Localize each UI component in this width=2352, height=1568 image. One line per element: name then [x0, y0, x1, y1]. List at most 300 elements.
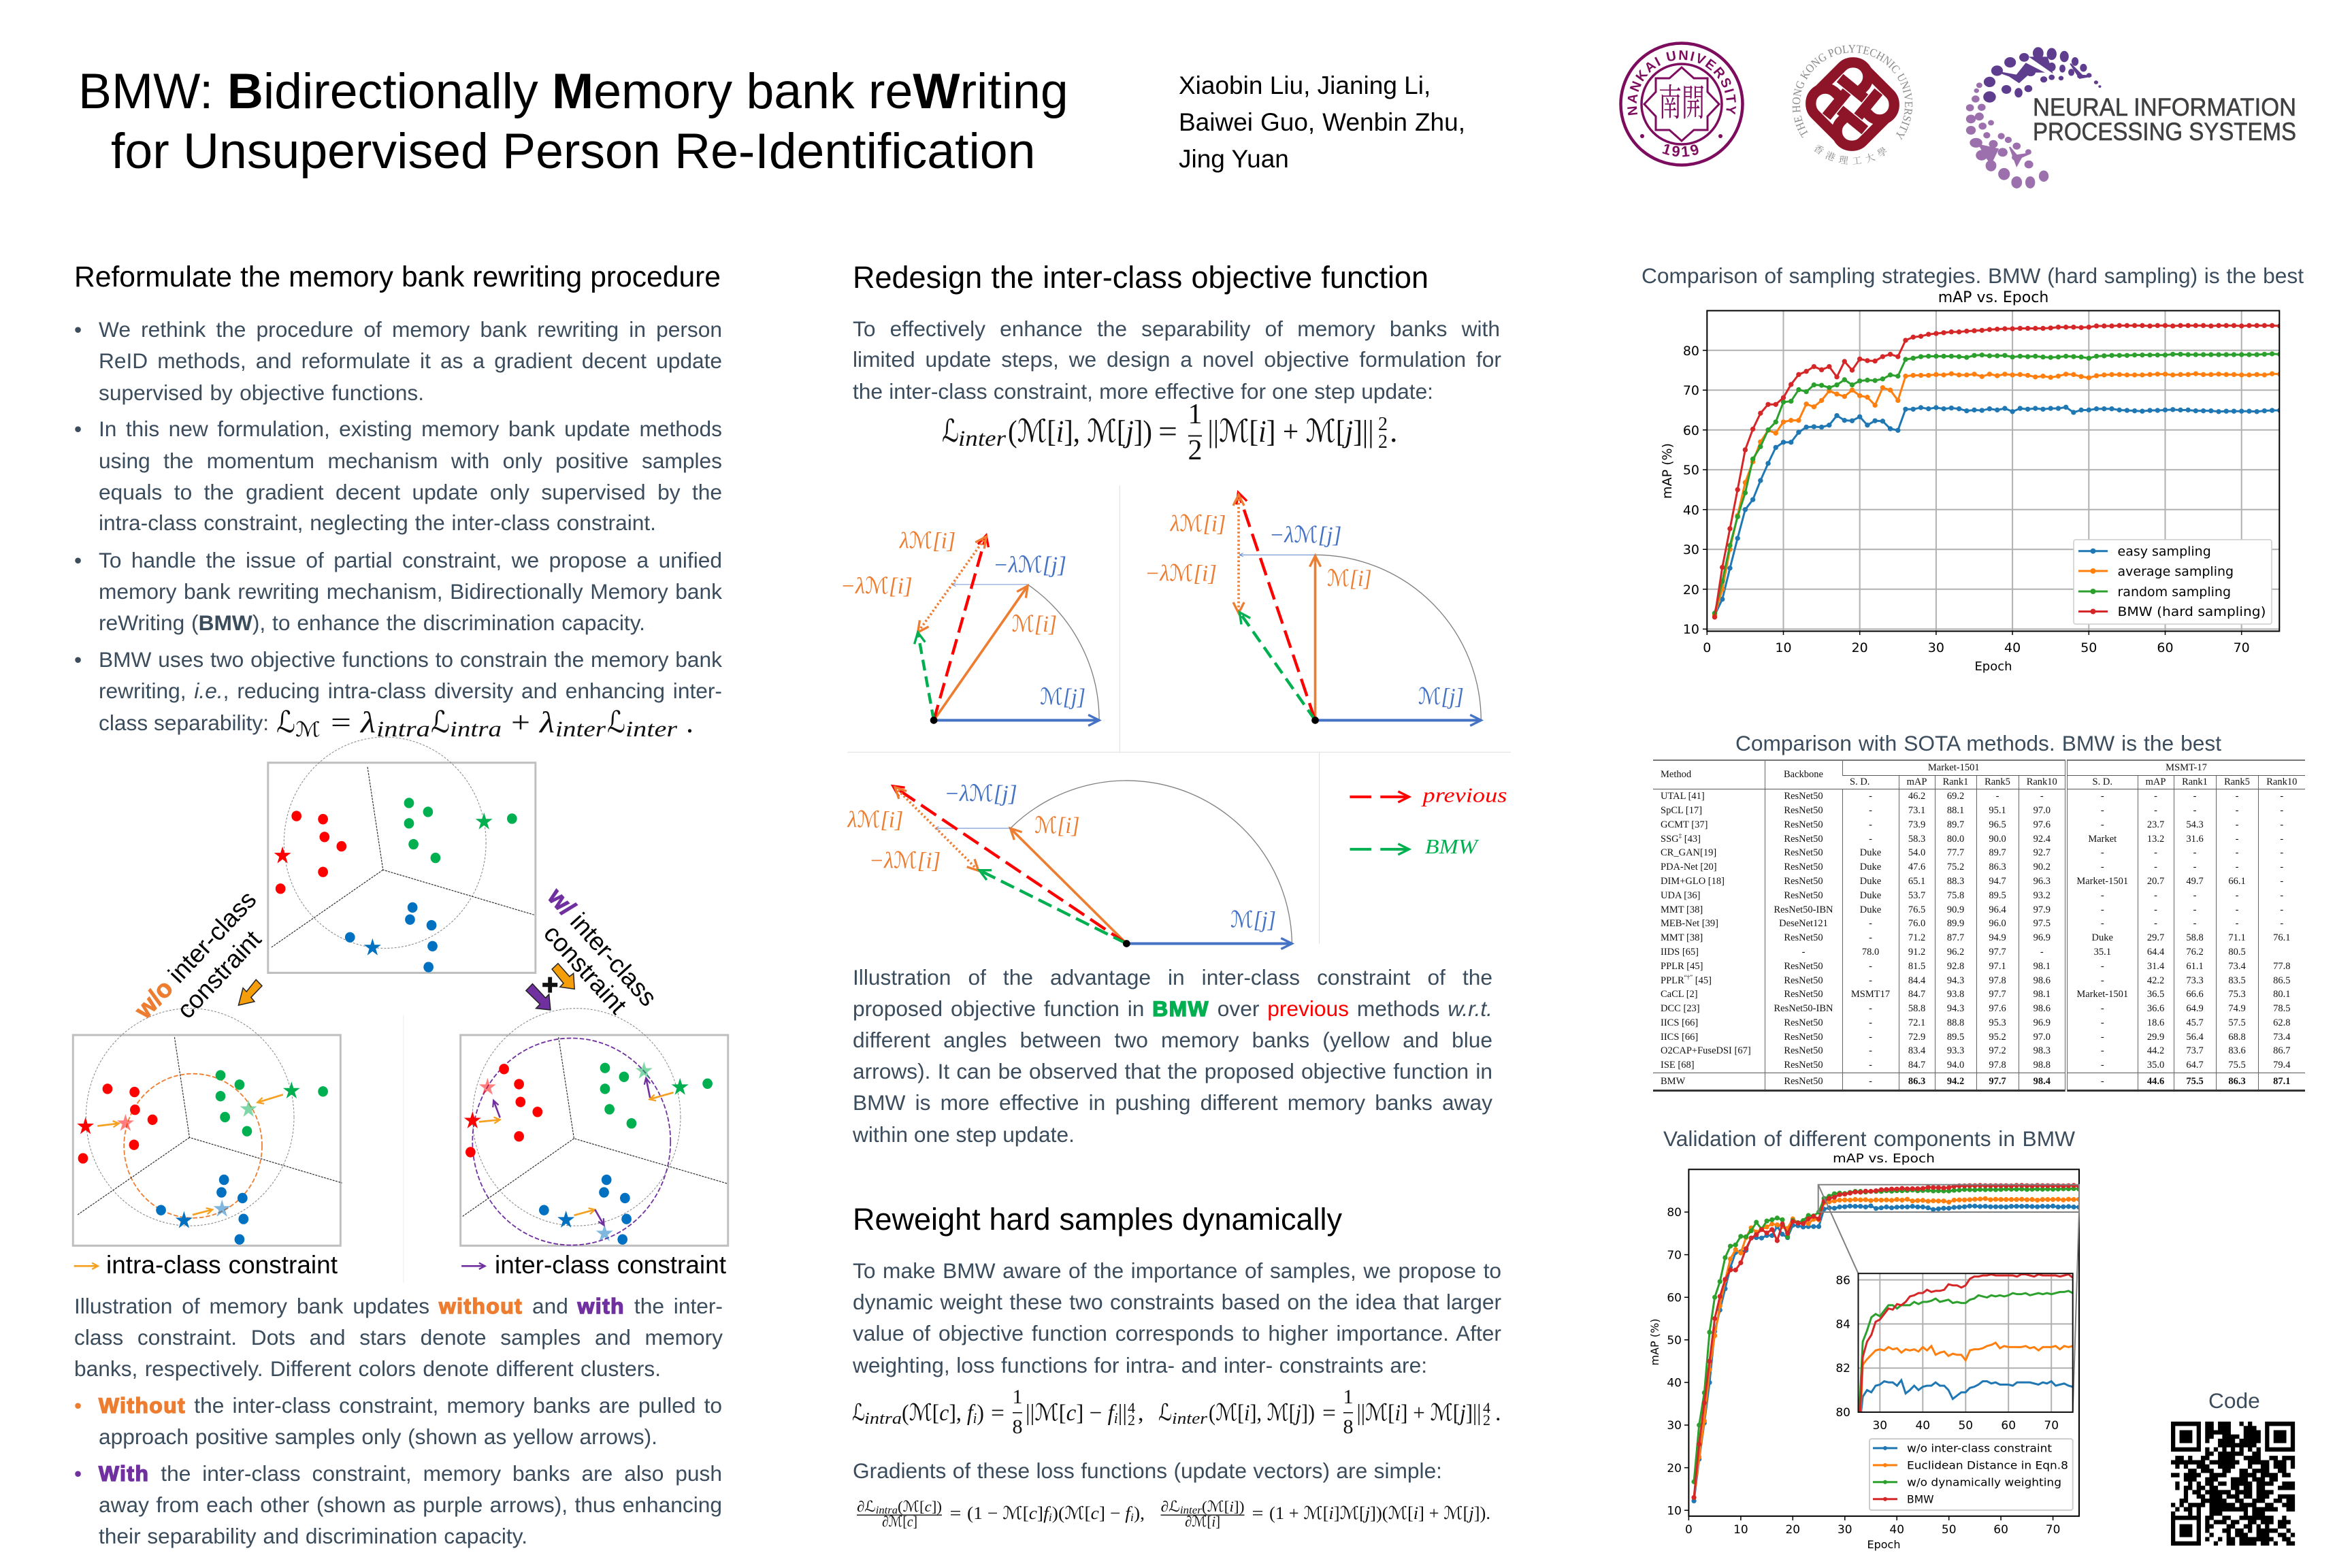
table: comparison with SOTA methods: 74.9 — [2228, 1003, 2246, 1014]
table: comparison with SOTA methods: ResNet50 — [1784, 819, 1823, 830]
text block: memory bank explanation: • — [74, 1461, 82, 1486]
text block: memory bank explanation: banks, respectively. Different colors denote different clusters. — [74, 1356, 661, 1381]
table: comparison with SOTA methods: - — [2101, 961, 2104, 972]
table: comparison with SOTA methods: 77.7 — [1947, 847, 1964, 858]
text block: reformulate bullets: • — [74, 317, 82, 342]
table: comparison with SOTA methods: 86.3 — [1989, 862, 2006, 872]
table: comparison with SOTA methods: - — [2236, 918, 2238, 929]
table: comparison with SOTA methods: 36.6 — [2147, 1003, 2164, 1014]
formula: gradients: ∂ℒ — [857, 1498, 875, 1515]
table: comparison with SOTA methods: Rank10 — [2027, 777, 2057, 787]
table: comparison with SOTA methods: 58.8 — [1908, 1003, 1925, 1014]
chart title: mAP vs. Epoch — [1938, 289, 2048, 306]
chart: sampling strategies mAP vs epoch: 80 — [1683, 344, 1699, 359]
table: comparison with SOTA methods: - — [2280, 819, 2283, 830]
formula: weighted losses: . — [1495, 1401, 1501, 1426]
table: comparison with SOTA methods: - — [2101, 975, 2104, 985]
table: comparison with SOTA methods: 89.7 — [1947, 819, 1964, 830]
table: comparison with SOTA methods: 73.9 — [1908, 819, 1925, 830]
panel: obtuse angle: ℳ[j] — [1230, 907, 1276, 932]
heading: code: Code — [2208, 1388, 2260, 1413]
table: comparison with SOTA methods: - — [2154, 847, 2157, 858]
table: comparison with SOTA methods: 94.3 — [1947, 975, 1964, 985]
table: comparison with SOTA methods: 93.2 — [2034, 890, 2051, 901]
table: comparison with SOTA methods: - — [2154, 862, 2157, 872]
table: comparison with SOTA methods: Rank5 — [1984, 777, 2010, 787]
table: comparison with SOTA methods: - — [2193, 904, 2196, 915]
table: comparison with SOTA methods: 75.5 — [2186, 1076, 2204, 1087]
text block: reformulate bullets: intra-class constraint, neglecting the inter-class constraint. — [99, 510, 656, 535]
formula: gradients: c]) — [925, 1498, 941, 1515]
axis tick labels: 70 — [2234, 640, 2250, 655]
table: comparison with SOTA methods: - — [1869, 932, 1872, 943]
text block: advantage illustration: different angles between two memory banks (yellow and blue — [853, 1028, 1492, 1052]
table: comparison with SOTA methods: 87.1 — [2273, 1076, 2290, 1087]
table: comparison with SOTA methods: - — [2280, 847, 2283, 858]
table: comparison with SOTA methods: 76.2 — [2186, 947, 2204, 958]
inset chart: 40 — [1915, 1419, 1930, 1433]
table: comparison with SOTA methods: Rank1 — [2182, 777, 2208, 787]
text block: memory bank explanation: their separability and discrimination capacity. — [99, 1524, 527, 1548]
table: comparison with SOTA methods: ISE [68] — [1661, 1060, 1695, 1071]
text block: reformulate bullets: memory bank rewriting mechanism, Bidirectionally Memory bank — [99, 579, 722, 604]
formula: gradients — [857, 1498, 1490, 1530]
table: comparison with SOTA methods: 79.4 — [2273, 1060, 2290, 1071]
table: comparison with SOTA methods: GCMT [37] — [1661, 819, 1708, 830]
axis tick labels: 50 — [1942, 1523, 1957, 1537]
table: comparison with SOTA methods: - — [2193, 791, 2196, 802]
table: comparison with SOTA methods: - — [1869, 918, 1872, 929]
table: comparison with SOTA methods: 44.6 — [2147, 1076, 2164, 1087]
table: comparison with SOTA methods: 73.1 — [1908, 805, 1925, 816]
table: comparison with SOTA methods: - — [2280, 862, 2283, 872]
inset chart — [1835, 1273, 2073, 1433]
table: comparison with SOTA methods: 88.8 — [1947, 1017, 1964, 1028]
formula: weighted losses: = — [991, 1401, 1004, 1426]
table: comparison with SOTA methods: - — [2101, 1045, 2104, 1056]
table: comparison with SOTA methods: 97.1 — [1989, 961, 2006, 972]
table: comparison with SOTA methods: 46.2 — [1908, 791, 1925, 802]
table: comparison with SOTA methods: 96.4 — [1989, 904, 2006, 915]
axis tick labels: 0 — [1685, 1523, 1693, 1537]
table: comparison with SOTA methods: CR_GAN[19] — [1661, 847, 1716, 858]
logo: Nankai University: 1919 — [1662, 144, 1699, 157]
table: comparison with SOTA methods: mAP — [2146, 777, 2166, 787]
table: comparison with SOTA methods: - — [2154, 890, 2157, 901]
text block: redesign — [853, 316, 1501, 404]
table: comparison with SOTA methods: 80.0 — [1947, 834, 1964, 845]
legend: w/o dynamically weighting — [1907, 1477, 2061, 1489]
table: comparison with SOTA methods: - — [2193, 890, 2196, 901]
table: comparison with SOTA methods: Market — [2088, 834, 2117, 845]
table: comparison with SOTA methods: 42.2 — [2147, 975, 2164, 985]
formula: weighted losses: inter — [1172, 1410, 1208, 1428]
logo: Hong Kong Polytechnic University: THE HONG KONG POLYTECHNIC UNIVERSITY — [1793, 45, 1912, 140]
table: comparison with SOTA methods: - — [2154, 904, 2157, 915]
panel: acute angle — [840, 528, 1099, 720]
chart: component validation mAP vs epoch: 40 — [1667, 1376, 1682, 1390]
diagram: vector update illustration — [840, 486, 1511, 947]
QR code — [2171, 1424, 2295, 1544]
table: comparison with SOTA methods: - — [1869, 975, 1872, 985]
caption: memory bank legend right: inter-class constraint — [495, 1251, 726, 1279]
table: comparison with SOTA methods: 54.0 — [1908, 847, 1925, 858]
axis tick labels: 10 — [1775, 640, 1792, 655]
table: comparison with SOTA methods: MMT [38] — [1661, 904, 1703, 915]
axis tick labels: 40 — [1889, 1523, 1904, 1537]
table: comparison with SOTA methods: 97.8 — [1989, 1060, 2006, 1071]
table: comparison with SOTA methods: MEB-Net [39] — [1661, 918, 1718, 929]
data lines — [1694, 1186, 2079, 1501]
chart: component validation mAP vs epoch: 60 — [1667, 1292, 1682, 1305]
table: comparison with SOTA methods: - — [1869, 1045, 1872, 1056]
table: comparison with SOTA methods: 73.4 — [2228, 961, 2246, 972]
table: comparison with SOTA methods: - — [1869, 805, 1872, 816]
chart: sampling strategies mAP vs epoch — [1660, 289, 2280, 674]
table: comparison with SOTA methods: Market-1501 — [2076, 989, 2128, 1000]
table: comparison with SOTA methods: 92.4 — [2034, 834, 2051, 845]
inset chart: 86 — [1835, 1274, 1850, 1288]
heading: redesign: Redesign the inter-class objective function — [853, 260, 1428, 295]
formula: inter-class objective: = — [1158, 414, 1177, 448]
table: comparison with SOTA methods: - — [2236, 862, 2238, 872]
panel: acute angle: ℳ[j] — [1040, 685, 1085, 710]
table: comparison with SOTA methods: 80.1 — [2273, 989, 2290, 1000]
table: comparison with SOTA methods: 77.8 — [2273, 961, 2290, 972]
table: comparison with SOTA methods: UTAL [41] — [1661, 791, 1705, 802]
axis tick labels: 40 — [2004, 640, 2021, 655]
arrow: purple to with inter-class — [526, 984, 551, 1010]
diagram: memory bank update illustration — [73, 737, 728, 1283]
formula: total objective: + — [511, 706, 530, 739]
label: w/ inter-class constraint: w/ inter-class — [542, 882, 662, 1011]
legend: random sampling — [2118, 585, 2231, 600]
panel: right angle: −λℳ[i] — [1145, 561, 1217, 586]
inset chart: 30 — [1872, 1419, 1887, 1433]
formula: total objective: ℒ — [431, 706, 450, 739]
table: comparison with SOTA methods: ResNet50 — [1784, 1032, 1823, 1043]
formula: weighted losses: 4 — [1483, 1399, 1490, 1416]
table: comparison with SOTA methods: ResNet50 — [1784, 1017, 1823, 1028]
legend: Euclidean Distance in Eqn.8 — [1907, 1459, 2068, 1471]
axis tick labels: 0 — [1703, 640, 1711, 655]
table: comparison with SOTA methods: - — [2236, 904, 2238, 915]
text block: memory bank explanation: class constraint. Dots and stars denote samples and memory — [74, 1325, 723, 1350]
table: comparison with SOTA methods: 98.8 — [2034, 1060, 2051, 1071]
axis tick labels: 60 — [1993, 1523, 2008, 1537]
table: comparison with SOTA methods: 90.9 — [1947, 904, 1964, 915]
data lines — [1715, 325, 2280, 617]
authors: Jing Yuan — [1179, 145, 1289, 173]
chart title: mAP vs. Epoch — [1833, 1152, 1935, 1166]
table: comparison with SOTA methods: ResNet50 — [1784, 961, 1823, 972]
table: comparison with SOTA methods: 57.5 — [2228, 1017, 2246, 1028]
table: comparison with SOTA methods: 97.9 — [2034, 904, 2051, 915]
table: comparison with SOTA methods: - — [2101, 1017, 2104, 1028]
legend: BMW — [1907, 1493, 1934, 1505]
heading: reweight: Reweight hard samples dynamically — [853, 1202, 1342, 1237]
table: comparison with SOTA methods: DCC [23] — [1661, 1003, 1700, 1014]
chart: sampling strategies mAP vs epoch: 20 — [1683, 583, 1699, 598]
text block: redesign: the inter-class constraint, more effective for one step update: — [853, 379, 1433, 404]
formula: total objective: ℒ — [607, 706, 625, 739]
table: comparison with SOTA methods: 83.5 — [2228, 975, 2246, 985]
formula: weighted losses — [852, 1386, 1501, 1438]
axis tick labels — [1685, 1523, 2060, 1537]
formula: inter-class objective: 2 — [1378, 414, 1388, 435]
table: comparison with SOTA methods: 90.0 — [1989, 834, 2006, 845]
table: comparison with SOTA methods: ResNet50 — [1784, 932, 1823, 943]
axis tick labels: 10 — [1733, 1523, 1748, 1537]
formula: inter-class objective: ||ℳ[i] + ℳ[j]|| — [1207, 414, 1373, 448]
table: comparison with SOTA methods: - — [2280, 805, 2283, 816]
table: comparison with SOTA methods: MMT [38] — [1661, 932, 1703, 943]
heading: component validation: Validation of different components in BMW — [1663, 1126, 2075, 1151]
formula: weighted losses: 2 — [1483, 1411, 1490, 1428]
table: comparison with SOTA methods: - — [2236, 819, 2238, 830]
label: w/o inter-class constraint: w/o inter-class — [129, 885, 262, 1024]
formula: gradients: i — [1130, 1511, 1134, 1524]
axis tick labels: 30 — [1928, 640, 1944, 655]
table: comparison with SOTA methods: 78.5 — [2273, 1003, 2290, 1014]
table: comparison with SOTA methods: - — [1869, 1076, 1872, 1087]
formula: gradients: ), — [1134, 1503, 1145, 1523]
table: comparison with SOTA methods: - — [2193, 847, 2196, 858]
table: comparison with SOTA methods: 53.7 — [1908, 890, 1925, 901]
table: comparison with SOTA methods: 87.7 — [1947, 932, 1964, 943]
table: comparison with SOTA methods: 54.3 — [2186, 819, 2204, 830]
formula: weighted losses: ℒ — [1158, 1401, 1172, 1426]
table: comparison with SOTA methods: Method — [1661, 769, 1691, 780]
table: comparison with SOTA methods: 84.4 — [1908, 975, 1925, 985]
table: comparison with SOTA methods: 76.1 — [2273, 932, 2290, 943]
panel: right angle — [1145, 493, 1481, 724]
table: comparison with SOTA methods: 68.8 — [2228, 1032, 2246, 1043]
text block: reformulate bullets: class separability: — [99, 710, 269, 735]
text block: redesign: To effectively enhance the separability of memory banks with — [853, 316, 1500, 341]
table: comparison with SOTA methods: 89.5 — [1989, 890, 2006, 901]
table: comparison with SOTA methods: Duke — [1860, 862, 1881, 872]
arrow: intra-class legend — [74, 1265, 98, 1267]
text block: reformulate bullets: • — [74, 548, 82, 572]
formula: weighted losses: 1 — [1013, 1386, 1022, 1408]
text block: reformulate bullets: ReID methods, and reformulate it as a gradient decent update — [99, 348, 722, 373]
text block: reweight: value of objective function corresponds to higher importance. After — [853, 1321, 1501, 1345]
panel: initial state — [268, 737, 536, 973]
table: comparison with SOTA methods: UDA [36] — [1661, 890, 1700, 901]
table: comparison with SOTA methods: 94.3 — [1947, 1003, 1964, 1014]
formula: total objective: λ — [359, 706, 376, 739]
table: comparison with SOTA methods: S. D. — [2093, 777, 2112, 787]
table: comparison with SOTA methods: Duke — [1860, 876, 1881, 887]
table: comparison with SOTA methods: 75.2 — [1947, 862, 1964, 872]
formula: gradients: intra — [876, 1505, 898, 1516]
table: comparison with SOTA methods: 84.7 — [1908, 989, 1925, 1000]
table: comparison with SOTA methods: - — [2101, 890, 2104, 901]
table: comparison with SOTA methods: 58.3 — [1908, 834, 1925, 845]
legend: easy sampling — [2118, 544, 2211, 559]
table: comparison with SOTA methods: SSG‡ [43] — [1661, 832, 1701, 845]
formula: total objective: = — [331, 706, 351, 739]
chart: component validation mAP vs epoch: 10 — [1667, 1504, 1682, 1518]
heading: sampling comparison: Comparison of sampling strategies. BMW (hard sampling) is the best — [1642, 263, 2304, 288]
table: comparison with SOTA methods: 97.7 — [1989, 989, 2006, 1000]
chart: sampling strategies mAP vs epoch: 60 — [1683, 423, 1699, 438]
table: comparison with SOTA methods: - — [2040, 791, 2044, 802]
formula: gradients: )(ℳ[ — [1052, 1503, 1091, 1523]
heading: SOTA comparison: Comparison with SOTA methods. BMW is the best — [1735, 731, 2221, 755]
table: comparison with SOTA methods: 58.8 — [2186, 932, 2204, 943]
panel: right angle: −λℳ[j] — [1269, 523, 1341, 548]
chart: component validation mAP vs epoch: 70 — [1667, 1249, 1682, 1262]
formula: gradients: i — [1049, 1511, 1052, 1524]
legend — [2074, 540, 2272, 624]
formula: weighted losses: 1 — [1343, 1386, 1353, 1408]
formula: inter-class objective: (ℳ[i], ℳ[j]) — [1008, 414, 1152, 448]
table: comparison with SOTA methods: PDA-Net [20] — [1661, 862, 1717, 872]
panel: obtuse angle: ℳ[i] — [1034, 813, 1079, 838]
arrow: to without inter-class — [238, 979, 262, 1005]
table: comparison with SOTA methods: 66.1 — [2228, 876, 2246, 887]
table: comparison with SOTA methods: - — [2040, 947, 2044, 958]
table: comparison with SOTA methods: IIDS [65] — [1661, 947, 1699, 958]
text block: memory bank explanation: away from each other (shown as purple arrows), thus enhancing — [99, 1492, 722, 1517]
formula: weighted losses: = — [1322, 1401, 1336, 1426]
table: comparison with SOTA methods: - — [2280, 876, 2283, 887]
table: comparison with SOTA methods: 78.0 — [1862, 947, 1879, 958]
chart: component validation mAP vs epoch: 20 — [1667, 1462, 1682, 1475]
label: w/ inter-class constraint: constraint — [538, 919, 632, 1019]
table: comparison with SOTA methods: 73.3 — [2186, 975, 2204, 985]
table: comparison with SOTA methods: 93.8 — [1947, 989, 1964, 1000]
formula: inter-class objective: ℒ — [942, 414, 959, 448]
table: comparison with SOTA methods: 96.5 — [1989, 819, 2006, 830]
text block: advantage illustration: BMW is more effective in pushing different memory banks away — [853, 1090, 1492, 1115]
legend — [1869, 1439, 2073, 1510]
formula: gradients: inter — [1180, 1505, 1203, 1516]
table: comparison with SOTA methods: 89.7 — [1989, 847, 2006, 858]
icon: purple dot swirl — [1967, 48, 2100, 188]
panel: acute angle: −λℳ[i] — [840, 574, 913, 599]
formula: gradients: (ℳ[ — [898, 1498, 925, 1515]
logo: Hong Kong Polytechnic University: 香港理工大學 — [1814, 144, 1886, 165]
table: comparison with SOTA methods: 65.1 — [1908, 876, 1925, 887]
table: comparison with SOTA methods: PPLR [45] — [1661, 961, 1703, 972]
formula: weighted losses: , — [1138, 1401, 1143, 1426]
formula: weighted losses: i — [973, 1409, 977, 1426]
table: comparison with SOTA methods: - — [2101, 1032, 2104, 1043]
logo: Nankai University: 南開 — [1659, 74, 1705, 127]
table: comparison with SOTA methods: 98.3 — [2034, 1045, 2051, 1056]
text block: reweight — [853, 1258, 1501, 1377]
table: comparison with SOTA methods: 13.2 — [2147, 834, 2164, 845]
table: comparison with SOTA methods: 31.4 — [2147, 961, 2164, 972]
table: comparison with SOTA methods: 94.9 — [1989, 932, 2006, 943]
chart: component validation mAP vs epoch: 30 — [1667, 1419, 1682, 1433]
text block: reformulate bullets: supervised by objective functions. — [99, 380, 424, 405]
panel: right angle: ℳ[i] — [1327, 566, 1372, 591]
formula: total objective: intra — [376, 717, 430, 742]
title: BMW: Bidirectionally Memory bank reWriting — [78, 63, 1068, 119]
table: comparison with SOTA methods: 91.2 — [1908, 947, 1925, 958]
text: neural information processing systems: PROCESSING SYSTEMS — [2033, 118, 2296, 146]
table: comparison with SOTA methods: 44.2 — [2147, 1045, 2164, 1056]
table: comparison with SOTA methods: - — [1869, 819, 1872, 830]
chart: component validation mAP vs epoch: 80 — [1667, 1206, 1682, 1220]
table: comparison with SOTA methods: IICS [66] — [1661, 1032, 1698, 1043]
chart: sampling strategies mAP vs epoch: 50 — [1683, 463, 1699, 478]
text block: reformulate bullets — [74, 317, 722, 735]
text block: advantage illustration — [853, 965, 1492, 1147]
formula: total objective: intra — [450, 717, 502, 742]
table: comparison with SOTA methods: 98.4 — [2034, 1076, 2051, 1087]
heading: reformulate: Reformulate the memory bank rewriting procedure — [74, 261, 721, 293]
table: comparison with SOTA methods: ResNet50-IBN — [1774, 904, 1833, 915]
table: comparison with SOTA methods: ResNet50 — [1784, 1060, 1823, 1071]
table: comparison with SOTA methods: 72.1 — [1908, 1017, 1925, 1028]
table: comparison with SOTA methods: - — [2280, 890, 2283, 901]
table: comparison with SOTA methods: 80.5 — [2228, 947, 2246, 958]
formula: inter-class objective: . — [1390, 414, 1398, 448]
axis title: mAP: mAP (%) — [1648, 1319, 1661, 1365]
text block: advantage illustration: within one step update. — [853, 1122, 1075, 1147]
text block: memory bank explanation — [74, 1294, 723, 1548]
table: comparison with SOTA methods: 97.5 — [2034, 918, 2051, 929]
table: comparison with SOTA methods: 89.9 — [1947, 918, 1964, 929]
axis tick labels — [1703, 640, 2250, 655]
axis title: epoch: Epoch — [1867, 1538, 1900, 1551]
formula: weighted losses: intra — [864, 1410, 902, 1428]
table: comparison with SOTA methods: 73.7 — [2186, 1045, 2204, 1056]
text block: reweight: weighting, loss functions for intra- and inter- constraints are: — [853, 1353, 1427, 1377]
inset chart: 60 — [2001, 1419, 2016, 1433]
table: comparison with SOTA methods: 76.5 — [1908, 904, 1925, 915]
text block: redesign: limited update steps, we design a novel objective formulation for — [853, 347, 1501, 372]
panel: with inter-class constraint — [461, 1009, 728, 1245]
table: comparison with SOTA methods: 97.6 — [2034, 819, 2051, 830]
table: comparison with SOTA methods: 97.6 — [1989, 1003, 2006, 1014]
text block: reformulate bullets: equals to the gradient decent update only supervised by the — [99, 480, 722, 504]
table: comparison with SOTA methods: Rank1 — [1943, 777, 1968, 787]
table: comparison with SOTA methods: SpCL [17] — [1661, 805, 1702, 816]
formula: gradients: ∂ℒ — [1161, 1498, 1179, 1515]
arrow: inter-class legend — [461, 1265, 485, 1267]
table: comparison with SOTA methods: 96.0 — [1989, 918, 2006, 929]
table: comparison with SOTA methods: Duke — [1860, 904, 1881, 915]
panel: obtuse angle: −λℳ[i] — [869, 848, 941, 873]
formula: weighted losses: 8 — [1343, 1416, 1353, 1438]
table: comparison with SOTA methods: 95.3 — [1989, 1017, 2006, 1028]
legend: w/o inter-class constraint — [1907, 1443, 2052, 1455]
table: comparison with SOTA methods: 97.8 — [1989, 975, 2006, 985]
label: w/o inter-class constraint: constraint — [172, 925, 267, 1024]
table: comparison with SOTA methods: 73.4 — [2273, 1032, 2290, 1043]
panel: acute angle: −λℳ[j] — [993, 553, 1066, 578]
axis tick labels: 60 — [2157, 640, 2174, 655]
table: comparison with SOTA methods: O2CAP+FuseDSI [67] — [1661, 1045, 1751, 1056]
logo: Nankai University: NANKAI UNIVERSITY — [1627, 50, 1736, 116]
chart: component validation mAP vs epoch: 50 — [1667, 1334, 1682, 1348]
table: comparison with SOTA methods: ResNet50 — [1784, 1045, 1823, 1056]
table: comparison with SOTA methods: - — [2280, 904, 2283, 915]
table: comparison with SOTA methods: PPLR“†” [45] — [1661, 974, 1712, 985]
table: comparison with SOTA methods: ResNet50 — [1784, 876, 1823, 887]
table: comparison with SOTA methods: 88.3 — [1947, 876, 1964, 887]
table: comparison with SOTA methods: - — [2101, 862, 2104, 872]
table: comparison with SOTA methods: 20.7 — [2147, 876, 2164, 887]
formula: total objective: ℒ — [276, 706, 295, 739]
table: comparison with SOTA methods: - — [2101, 819, 2104, 830]
